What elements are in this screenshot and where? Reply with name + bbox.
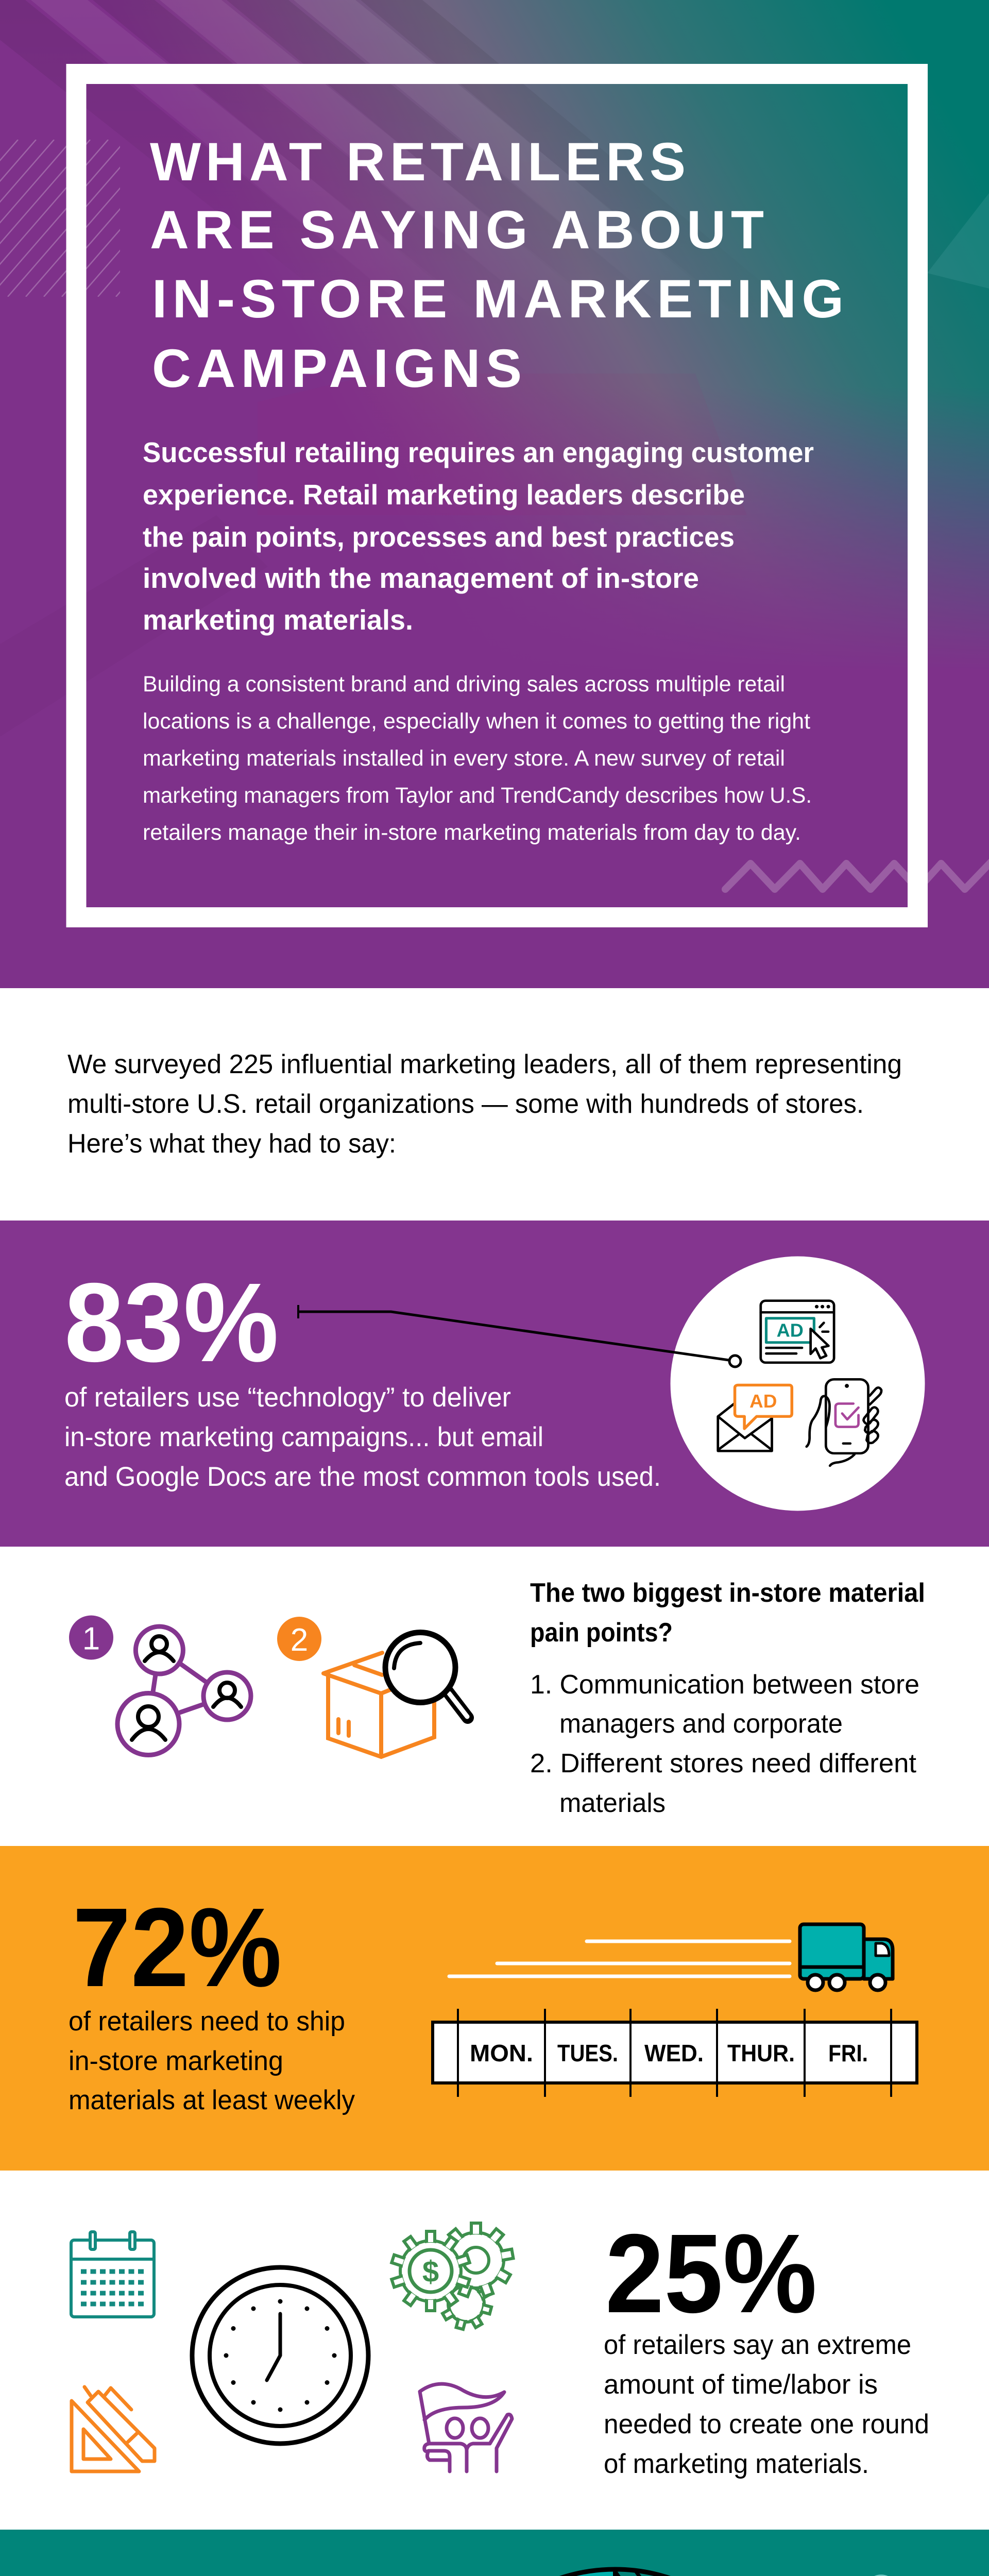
stat description <box>64 1382 661 1492</box>
intro lead text: marketing materials. <box>143 604 413 636</box>
list heading: pain points? <box>530 1618 673 1648</box>
donut chart <box>559 2567 671 2576</box>
stat description: and Google Docs are the most common tools used. <box>64 1462 661 1492</box>
panel: 72 percent <box>0 1846 989 2171</box>
icon: browser ad: AD <box>777 1320 804 1341</box>
stat description: materials at least weekly <box>69 2085 355 2115</box>
stat description: needed to create one round <box>604 2409 929 2439</box>
title: ARE SAYING ABOUT <box>150 200 764 260</box>
badge 1: 1 <box>82 1621 100 1657</box>
icon: box and magnifier <box>323 1632 468 1757</box>
intro lead text: Successful retailing requires an engaging customer <box>143 436 814 468</box>
weekday strip: FRI. <box>828 2040 868 2066</box>
list heading <box>530 1578 925 1648</box>
panel: pain points <box>69 1578 925 1818</box>
intro paragraph: Building a consistent brand and driving sales across multiple retail <box>143 672 785 697</box>
icon: people with flag <box>420 2384 512 2471</box>
stat 25%: 25% <box>605 2211 817 2336</box>
connector line <box>298 1305 741 1367</box>
white frame <box>76 74 918 917</box>
stat description: of retailers use “technology” to deliver <box>64 1382 511 1413</box>
title: WHAT RETAILERS <box>150 132 686 192</box>
stat description: of retailers need to ship <box>69 2006 345 2037</box>
weekday strip: MON. <box>470 2040 533 2066</box>
speed lines <box>449 1941 790 1976</box>
intro paragraph: marketing managers from Taylor and TrendCandy describes how U.S. <box>143 783 812 808</box>
intro lead text: experience. Retail marketing leaders describe <box>143 479 745 511</box>
stat description: amount of time/labor is <box>604 2369 878 2400</box>
intro paragraph: retailers manage their in-store marketing materials from day to day. <box>143 820 801 845</box>
list items: 2. Different stores need different <box>530 1749 917 1778</box>
icon: email ad <box>718 1385 792 1451</box>
icons: ad channels <box>718 1301 881 1466</box>
list items: managers and corporate <box>559 1709 843 1739</box>
panel: 50 percent <box>0 2530 989 2576</box>
badge 2: 2 <box>291 1622 308 1658</box>
stat description: in-store marketing <box>69 2046 283 2076</box>
icon: ruler and pencil <box>72 2387 155 2471</box>
panel: 25 percent <box>71 2211 929 2479</box>
survey intro text: multi-store U.S. retail organizations — some with hundreds of stores. <box>67 1089 864 1119</box>
survey intro text: Here’s what they had to say: <box>67 1129 396 1159</box>
stat description: of marketing materials. <box>604 2449 869 2479</box>
icon: connected people <box>117 1626 251 1755</box>
icon: gears <box>391 2223 513 2329</box>
stat 72%: 72% <box>73 1885 282 2010</box>
icon: browser ad <box>761 1301 834 1363</box>
stat description: in-store marketing campaigns... but email <box>64 1422 543 1452</box>
list items: materials <box>559 1788 666 1818</box>
intro paragraph <box>143 672 812 845</box>
title <box>150 132 844 399</box>
list items <box>530 1670 919 1818</box>
icon: clock <box>192 2267 368 2444</box>
weekday strip: TUES. <box>557 2040 618 2066</box>
title: IN-STORE MARKETING <box>152 269 844 329</box>
intro lead text: involved with the management of in-store <box>143 562 699 594</box>
white circle <box>671 1256 925 1511</box>
weekday strip <box>433 2009 917 2097</box>
survey intro text: We surveyed 225 influential marketing leaders, all of them representing <box>67 1049 902 1079</box>
stat description: of retailers say an extreme <box>604 2330 911 2360</box>
survey intro text <box>67 1049 902 1159</box>
icon: gears: $ <box>422 2255 439 2289</box>
badge 2 <box>277 1617 321 1661</box>
weekday strip: WED. <box>644 2040 704 2066</box>
stat description <box>604 2330 929 2479</box>
intro paragraph: marketing materials installed in every store. A new survey of retail <box>143 746 785 771</box>
icon: truck <box>800 1924 893 1990</box>
intro lead text <box>143 436 814 636</box>
badge 1 <box>69 1616 113 1660</box>
icon: email ad: AD <box>749 1391 777 1412</box>
icon: calendar <box>71 2232 154 2317</box>
title: CAMPAIGNS <box>152 338 522 399</box>
stat 83%: 83% <box>64 1260 279 1385</box>
icon: phone in hand <box>807 1379 881 1466</box>
panel: header <box>0 0 989 988</box>
stat description <box>69 2006 355 2115</box>
intro paragraph: locations is a challenge, especially when it comes to getting the right <box>143 709 810 734</box>
panel: 83 percent <box>0 1221 989 1547</box>
pain points list <box>530 1578 925 1818</box>
intro lead text: the pain points, processes and best practices <box>143 521 735 553</box>
weekday strip: THUR. <box>727 2040 795 2066</box>
list items: 1. Communication between store <box>530 1670 919 1700</box>
list heading: The two biggest in-store material <box>530 1578 925 1608</box>
